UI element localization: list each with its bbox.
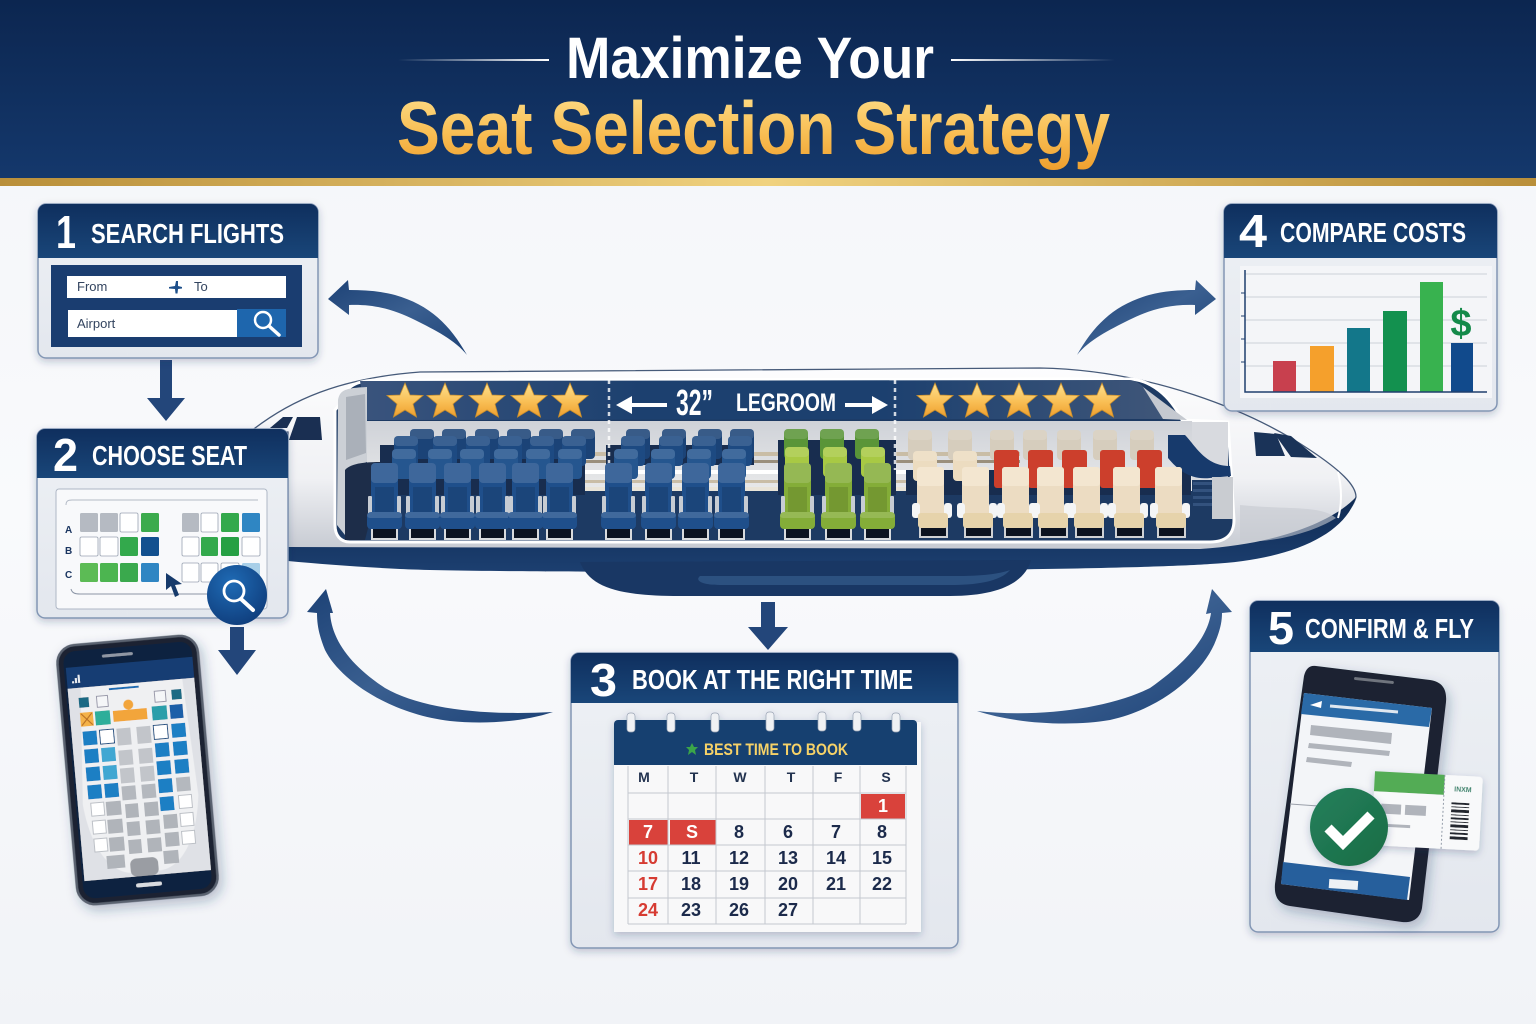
icon: green star <box>686 743 698 755</box>
calendar dates: 21 <box>826 874 846 894</box>
arrow: plane to step 3 <box>748 602 788 650</box>
phone text lines <box>1306 725 1392 767</box>
calendar dates: 8 <box>734 822 744 842</box>
seat shadows <box>380 440 1191 495</box>
panel 4: compare costs <box>1224 204 1497 411</box>
calendar <box>614 712 921 932</box>
weekday labels <box>638 769 891 785</box>
title: Maximize Your <box>566 26 934 91</box>
step number 4: 4 <box>1239 205 1267 257</box>
calendar grid <box>628 766 906 924</box>
heading: confirm and fly: CONFIRM & FLY <box>1305 613 1474 644</box>
heading: choose seat: CHOOSE SEAT <box>92 440 247 471</box>
phone screen <box>68 678 211 881</box>
heading: book at the right time: BOOK AT THE RIGHT TIME <box>632 664 913 695</box>
panel 3: book at the right time <box>571 653 958 948</box>
title: Seat Selection Strategy <box>397 86 1110 170</box>
weekday labels: F <box>834 769 843 785</box>
boarding pass <box>1371 771 1483 851</box>
bar chart <box>1240 266 1492 398</box>
belly fairing <box>580 560 1031 596</box>
dollar sign: $ <box>1450 303 1472 345</box>
seat map: A <box>65 525 72 536</box>
seat map: C <box>65 570 72 581</box>
boarding pass: INXM <box>1454 786 1472 794</box>
arrow: curve to search flights <box>328 280 467 355</box>
calendar dates: 26 <box>729 900 749 920</box>
confirmation phone <box>1275 666 1446 922</box>
arrow: step 1 to step 2 <box>147 360 185 421</box>
phone app bar <box>66 657 194 689</box>
arrow: step 2 to phone <box>218 627 256 675</box>
calendar dates: 8 <box>877 822 887 842</box>
icon: magnifier badge <box>207 565 267 625</box>
forward bulkhead <box>1143 387 1187 420</box>
header banner <box>0 0 1536 186</box>
panel 5: confirm and fly <box>1250 601 1499 932</box>
panel 2: choose seat <box>37 429 288 625</box>
legroom label: LEGROOM <box>736 389 836 417</box>
legroom label: 32” <box>676 382 713 423</box>
calendar dates: 15 <box>872 848 892 868</box>
phone screen <box>1281 693 1432 900</box>
nose shading <box>1240 505 1336 541</box>
red day cells <box>629 794 905 845</box>
calendar dates: 6 <box>783 822 793 842</box>
calendar dates: S <box>686 822 698 842</box>
weekday labels: T <box>690 769 699 785</box>
calendar dates: 14 <box>826 848 846 868</box>
fairing highlight <box>698 570 1010 585</box>
tail window <box>270 417 322 440</box>
legroom dividers <box>609 380 895 470</box>
blue seats <box>367 429 754 539</box>
calendar dates: 7 <box>831 822 841 842</box>
stars right <box>917 383 1120 417</box>
arrow: curve from booking back left <box>307 589 553 722</box>
calendar title: BEST TIME TO BOOK <box>704 740 849 759</box>
airplane cutaway <box>250 368 1356 596</box>
calendar dates: 17 <box>638 874 658 894</box>
calendar dates: 13 <box>778 848 798 868</box>
search form: Airport <box>77 316 116 331</box>
arrow: curve from booking to confirm <box>977 589 1232 723</box>
calendar dates: 22 <box>872 874 892 894</box>
cream and red seats <box>908 430 1190 537</box>
calendar dates: 7 <box>643 822 653 842</box>
heading: compare costs: COMPARE COSTS <box>1280 217 1466 248</box>
calendar dates: 11 <box>681 848 701 868</box>
calendar dates: 23 <box>681 900 701 920</box>
phone top bar <box>1301 693 1432 727</box>
calendar dates: 20 <box>778 874 798 894</box>
title <box>397 26 1110 170</box>
icon: check badge <box>1310 788 1388 866</box>
search form: To <box>194 279 208 294</box>
calendar dates: 18 <box>681 874 701 894</box>
step number 5: 5 <box>1268 602 1294 654</box>
search form <box>51 265 302 347</box>
weekday labels: W <box>733 769 747 785</box>
step number 2: 2 <box>53 429 78 481</box>
arrow: curve to compare costs <box>1077 280 1216 355</box>
cabin wall <box>367 421 1192 491</box>
cockpit windows <box>1254 432 1317 458</box>
seat map: B <box>65 546 72 557</box>
icon: signal bars <box>72 675 80 683</box>
calendar dates: 27 <box>778 900 798 920</box>
search form: From <box>77 279 107 294</box>
cabin rear galley <box>337 387 385 540</box>
icon: cursor <box>166 573 182 597</box>
stars left <box>387 383 588 417</box>
calendar dates <box>638 796 892 920</box>
legroom label <box>616 382 888 423</box>
calendar dates: 24 <box>638 900 658 920</box>
panel 1: search flights <box>38 204 318 358</box>
calendar rings <box>627 712 900 732</box>
step number 1: 1 <box>56 206 76 258</box>
floor stripes <box>580 452 1020 491</box>
calendar dates: 1 <box>878 796 888 816</box>
green seats <box>780 429 895 539</box>
cabin interior <box>335 379 1234 542</box>
phone bottom bar <box>1281 862 1410 900</box>
cabin front galley <box>1168 422 1233 519</box>
calendar dates: 10 <box>638 848 658 868</box>
phone with seat map <box>56 634 219 906</box>
heading: search flights: SEARCH FLIGHTS <box>91 218 284 249</box>
calendar dates: 12 <box>729 848 749 868</box>
belly stripe <box>288 497 1356 572</box>
weekday labels: S <box>881 769 891 785</box>
weekday labels: T <box>787 769 796 785</box>
nose seam <box>1338 472 1341 518</box>
step number 3: 3 <box>590 654 617 706</box>
calendar dates: 19 <box>729 874 749 894</box>
fuselage <box>250 368 1356 552</box>
weekday labels: M <box>638 769 650 785</box>
seat map <box>56 489 267 609</box>
cabin ceiling band <box>360 380 1164 420</box>
